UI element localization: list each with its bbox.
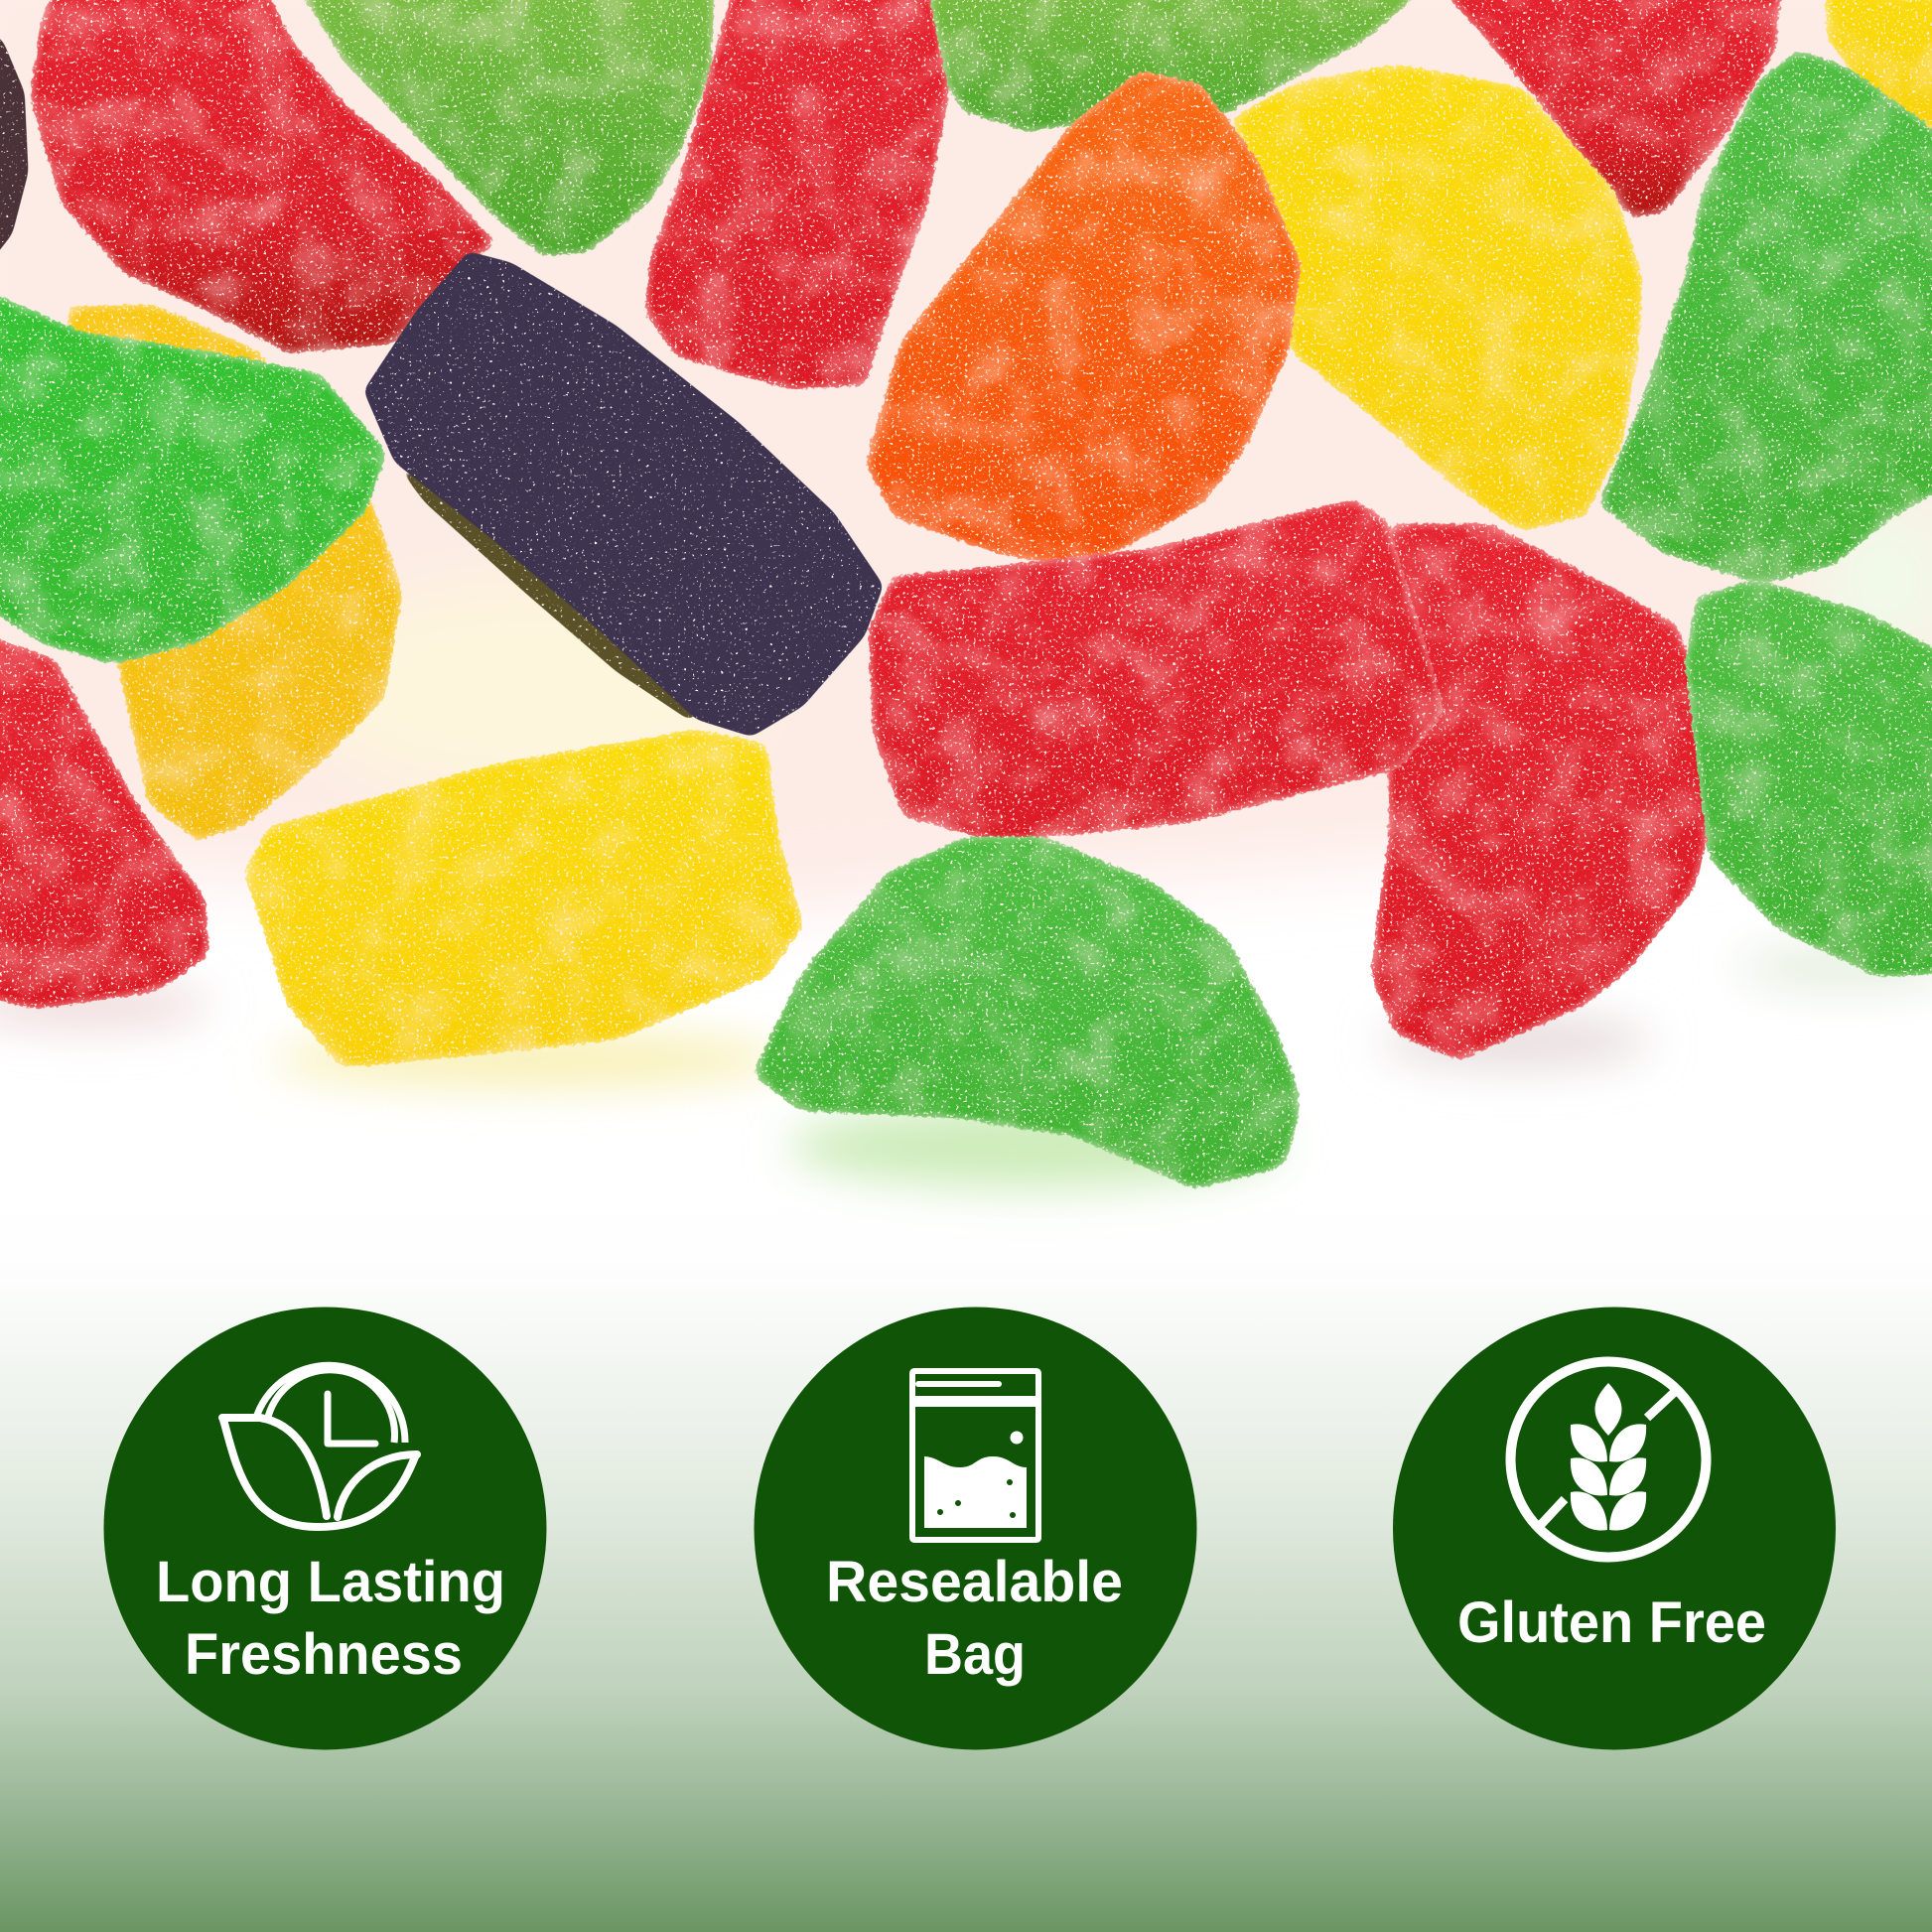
label: Bag bbox=[924, 1622, 1026, 1687]
candy: yellow block bottom bbox=[244, 730, 803, 1068]
badge: resealable bag bbox=[755, 1307, 1197, 1749]
candy: yellow slice behind left bbox=[68, 305, 403, 842]
candy: dark piece top-left bbox=[0, 31, 29, 269]
badge: gluten free bbox=[1393, 1307, 1836, 1749]
candy: purple bar underside bbox=[392, 460, 709, 721]
icon: resealable bag bbox=[909, 1371, 1041, 1540]
candy: yellow slice right bbox=[1231, 65, 1642, 531]
candy: red slice top-left bbox=[30, 0, 497, 353]
icon: crossed wheat bbox=[1511, 1362, 1706, 1557]
candy: yellow corner bbox=[1826, 0, 1932, 134]
candy: green half-moon bottom bbox=[752, 837, 1299, 1189]
candy: red scallop slice bbox=[1368, 523, 1717, 1061]
candy: green slice lower right bbox=[1685, 579, 1932, 977]
label: Resealable bbox=[826, 1550, 1123, 1614]
candy: red bar center bbox=[869, 499, 1446, 842]
label: Long Lasting bbox=[156, 1550, 505, 1614]
candy: green slice top bbox=[296, 0, 715, 256]
candy: green slice left bbox=[0, 290, 387, 664]
candy: green slice right bbox=[1598, 50, 1932, 584]
candy: green slice top center bbox=[926, 0, 1430, 136]
candy: orange slice bbox=[865, 70, 1302, 567]
candy: red block top center bbox=[644, 0, 950, 389]
label: Freshness bbox=[185, 1622, 463, 1687]
background tints and soft shadows bbox=[0, 0, 1932, 1187]
icon: clock and leaves bbox=[222, 1365, 417, 1527]
label: Gluten Free bbox=[1457, 1590, 1766, 1655]
candy: red slice lower left bbox=[0, 634, 208, 1009]
badge: long lasting freshness bbox=[103, 1307, 546, 1749]
candy photograph bbox=[0, 0, 1932, 1189]
candy: purple bar bbox=[363, 251, 884, 737]
candy: red slice top right bbox=[1438, 0, 1782, 218]
